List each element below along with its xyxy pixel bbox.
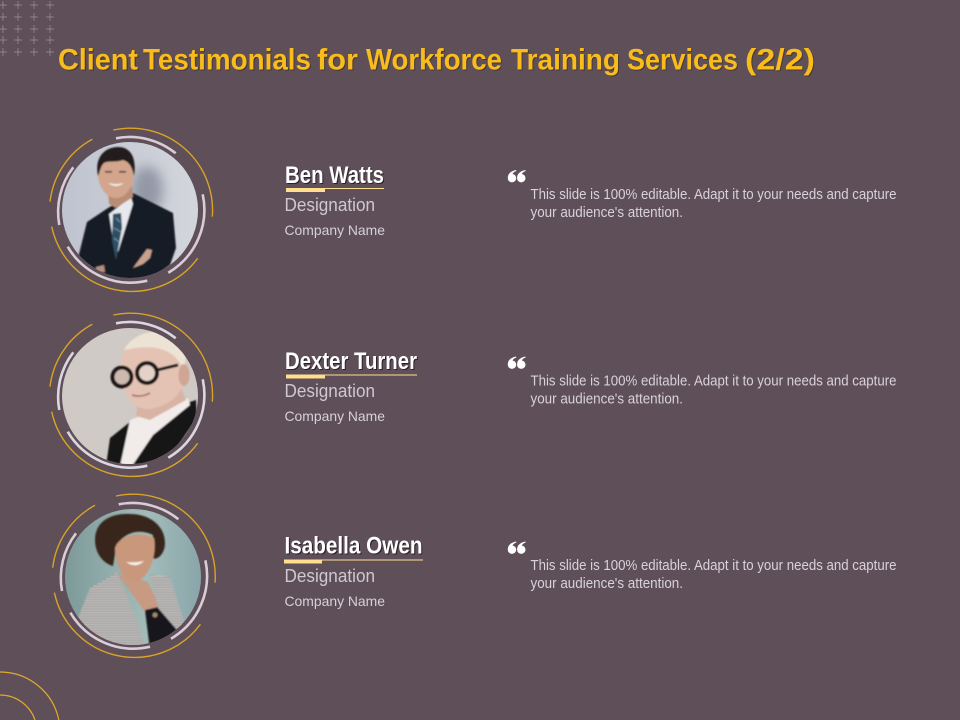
icon: quote mark (508, 356, 526, 369)
name: Dexter Turner (286, 349, 418, 376)
title: for (317, 44, 358, 76)
company: Company Name (284, 593, 385, 609)
name underline (286, 188, 384, 192)
testimonial: Dexter Turner (284, 348, 896, 424)
gold arcs (50, 128, 213, 291)
title: Testimonials (143, 44, 311, 76)
company: Company Name (284, 222, 385, 238)
name: Ben Watts (285, 162, 384, 189)
title: Training (512, 44, 621, 78)
quote text (530, 557, 896, 592)
name underline (284, 560, 423, 564)
quote text (530, 186, 896, 221)
light arcs (58, 137, 204, 283)
name: Dexter Turner (285, 348, 417, 375)
name underline (286, 374, 417, 378)
quote text: This slide is 100% editable. Adapt it to your needs and capture (530, 372, 896, 390)
title: Services (627, 44, 738, 76)
title: Workforce (367, 44, 503, 78)
photo: Dexter Turner (60, 326, 200, 466)
testimonial: Isabella Owen (284, 532, 896, 609)
quote text: your audience's attention. (530, 204, 683, 221)
title: Testimonials (144, 44, 312, 78)
designation: Designation (284, 195, 375, 215)
gold arcs (53, 494, 215, 657)
plus pattern (0, 1, 54, 56)
title: for (318, 44, 359, 78)
name: Isabella Owen (286, 534, 424, 560)
title (58, 44, 816, 78)
icon: quote mark (508, 170, 526, 182)
title: Training (511, 44, 620, 76)
portrait: Dexter Turner (50, 313, 213, 476)
quote text: This slide is 100% editable. Adapt it to your needs and capture (530, 557, 896, 574)
name: Ben Watts (286, 163, 385, 190)
designation: Designation (284, 566, 375, 586)
photo: Ben Watts (60, 140, 200, 282)
quote text: your audience's attention. (530, 390, 683, 408)
name: Isabella Owen (284, 532, 422, 560)
title: Client (59, 44, 139, 78)
title: Workforce (366, 44, 502, 76)
testimonial: Ben Watts (284, 162, 896, 238)
title: (2/2) (746, 44, 816, 78)
company: Company Name (284, 408, 385, 424)
gold arcs (50, 313, 213, 476)
quote text: your audience's attention. (530, 575, 683, 592)
portrait: Ben Watts (50, 128, 213, 291)
light arcs (61, 503, 207, 649)
quote text: This slide is 100% editable. Adapt it to your needs and capture (530, 186, 896, 203)
title: (2/2) (745, 44, 815, 76)
light arcs (58, 322, 204, 468)
portrait: Isabella Owen (53, 494, 215, 657)
icon: quote mark (508, 542, 526, 554)
designation: Designation (284, 381, 375, 401)
corner arcs (0, 672, 59, 720)
title: Services (628, 44, 739, 78)
photo: Isabella Owen (65, 509, 201, 645)
title: Client (58, 44, 138, 76)
quote text (530, 372, 896, 408)
